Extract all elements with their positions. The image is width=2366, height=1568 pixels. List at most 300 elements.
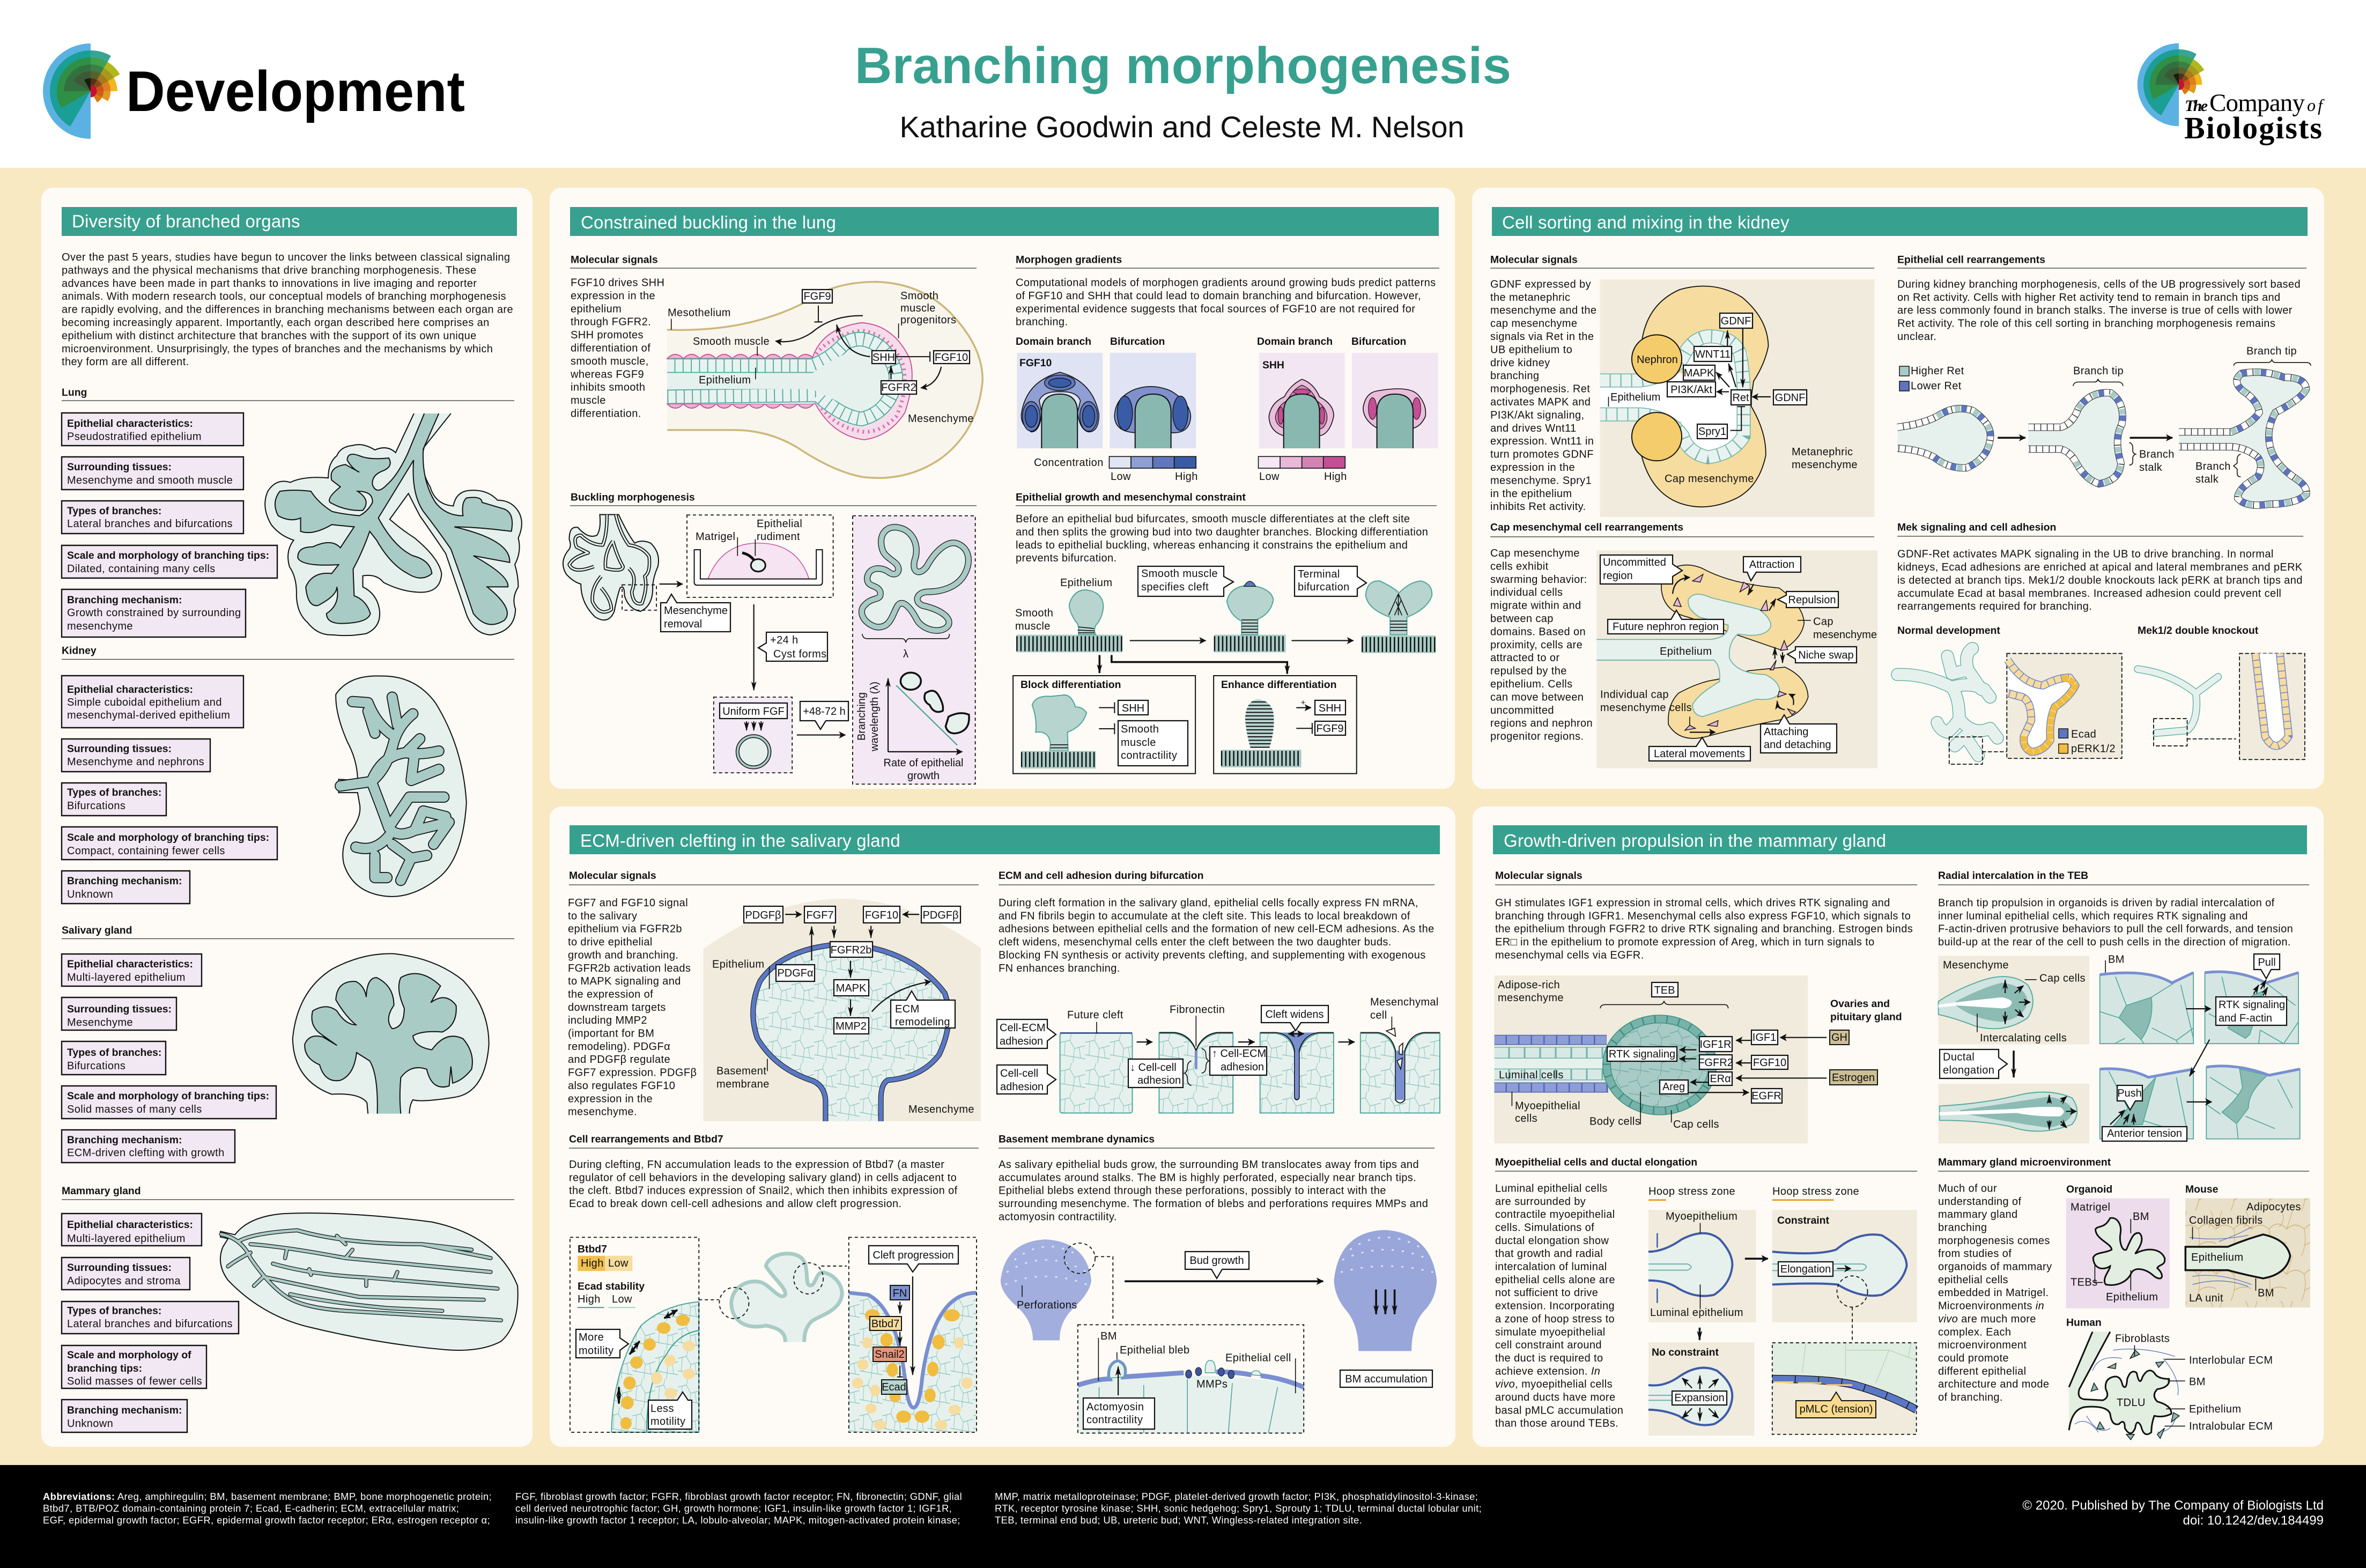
callout: less motility: Less xyxy=(650,1403,674,1415)
box: expansion: Expansion xyxy=(1674,1392,1725,1404)
text: myoepithelial cells: basal pMLC accumulation xyxy=(1495,1404,1623,1416)
diagram: Btbd7 and cleft progression: Low xyxy=(608,1258,629,1269)
text: salivary molecular signals: FGFR2b activation leads xyxy=(568,963,691,974)
abbreviations column 2: insulin-like growth factor 1 receptor; LA, lobulo-alveolar; MAPK, mitogen-activated protein kinase; xyxy=(515,1514,960,1526)
chart: morphogen concentration maps: Low xyxy=(1259,471,1280,483)
diagram: cap mesenchyme rearrangements xyxy=(1596,551,1877,768)
diagram: microenvironments: Human xyxy=(2066,1317,2102,1329)
diagram: lung bud signals: Mesenchyme xyxy=(908,413,974,425)
callout: attaching and detaching: Attaching xyxy=(1764,726,1808,738)
box: FN: FN xyxy=(893,1288,907,1299)
text: mammary microenvironment: from studies of xyxy=(1938,1248,2012,1260)
subsection heading: Cell rearrangements: Cell rearrangements and Btbd7 xyxy=(569,1134,723,1145)
section: Kidney: Kidney xyxy=(62,645,97,656)
text: myoepithelial cells: contractile myoepithelial xyxy=(1495,1209,1615,1221)
text: Mek signaling: is detected at branch tips. Mek1/2 double knockouts lack pERK at branch tips and xyxy=(1897,574,2303,586)
signal boxes: ERα xyxy=(1710,1073,1731,1085)
callout: ductal elongation xyxy=(1940,1049,2007,1078)
diagram: microenvironments: TDLU xyxy=(2117,1397,2146,1409)
abbreviations column 1: EGF, epidermal growth factor; EGFR, epidermal growth factor receptor; ERα, estrogen receptor α; xyxy=(43,1514,490,1526)
diagram: buckling morphogenesis: λ xyxy=(903,648,908,660)
box: smooth muscle contractility: Smooth xyxy=(1121,723,1159,735)
text: basement membrane: surrounding mesenchyme. The formation of blebs and perforations requires MMPs and xyxy=(999,1198,1428,1210)
diagram: cell sorting stages: stalk xyxy=(2139,462,2163,474)
callout: more motility: motility xyxy=(579,1345,613,1357)
salivary characteristics boxes: Branching mechanism: xyxy=(67,1134,182,1146)
callout: future nephron region: Future nephron region xyxy=(1613,621,1719,633)
text: salivary molecular signals: mesenchyme. xyxy=(568,1106,637,1118)
chart: morphogen concentration maps: Domain branch xyxy=(1257,336,1333,347)
signal boxes: FGFR2 xyxy=(1698,1057,1733,1069)
text: ECM and cell adhesion: During cleft formation in the salivary gland, epithelial cells focally express FN mRNA, xyxy=(999,897,1418,909)
callout: pMLC tension: pMLC (tension) xyxy=(1800,1403,1873,1415)
label: Nephron: Nephron xyxy=(1637,354,1678,366)
text: cell rearrangements: Ecad to break down cell-cell adhesions and allow cleft progression. xyxy=(569,1198,901,1210)
abbreviations column 3: TEB, terminal end bud; UB, ureteric bud; WNT, Wingless-related integration site. xyxy=(995,1514,1362,1526)
box: SHH inhibited: SHH xyxy=(1122,702,1144,714)
text: mammary microenvironment: architecture and mode xyxy=(1938,1379,2049,1391)
text: Mek signaling: GDNF-Ret activates MAPK signaling in the UB to drive branching. In normal xyxy=(1897,549,2274,560)
mammary characteristics boxes: Epithelial characteristics: xyxy=(67,1219,193,1231)
text: morphogen gradients: of FGF10 and SHH that could lead to domain branching and bifurcation. However, xyxy=(1016,290,1421,302)
text: salivary molecular signals: including MMP2 xyxy=(568,1015,647,1026)
chart: morphogen concentration maps: Bifurcation xyxy=(1110,336,1165,347)
box: SHH enhanced: SHH xyxy=(1319,702,1341,714)
diagram: cell sorting stages: Branch tip xyxy=(2246,345,2297,357)
box: increased cell-ECM adhesion: adhesion xyxy=(1221,1061,1264,1073)
box: Snail2: Snail2 xyxy=(875,1349,905,1360)
callout: uncommitted region xyxy=(1600,555,1682,584)
box: FGF9 inhibited: FGF9 xyxy=(1316,723,1344,735)
callout: cleft widens xyxy=(1261,1005,1328,1031)
heading bar xyxy=(1493,825,2307,854)
text: epithelial cell rearrangements: are less commonly found in branch stalks. The inverse is true of cells with lower xyxy=(1897,305,2293,316)
text: basement membrane: As salivary epithelial buds grow, the surrounding BM translocates away from tips and xyxy=(999,1159,1419,1171)
callout: +48-72 h: +48-72 h xyxy=(803,706,846,718)
text: salivary molecular signals: growth and branching. xyxy=(568,949,678,961)
callout: repulsion xyxy=(1778,591,1838,608)
diagram: smooth muscle and bifurcation: Smooth xyxy=(1015,607,1053,619)
diagram: cell sorting stages: stalk xyxy=(2195,474,2219,485)
text: salivary molecular signals: downstream targets xyxy=(568,1002,666,1014)
text: salivary molecular signals: FGF7 and FGF10 signal xyxy=(568,897,688,909)
mammary characteristics boxes: Adipocytes and stroma xyxy=(67,1275,181,1287)
text: cell rearrangements: the cleft. Btbd7 induces expression of Snail2, which then inhibits expression of xyxy=(569,1185,958,1197)
diagram: lung bud signals: muscle xyxy=(900,302,936,314)
mammary characteristics boxes: Unknown xyxy=(67,1418,113,1430)
label: Enhance differentiation: Enhance differentiation xyxy=(1221,679,1336,691)
text: mammary molecular signals: GH stimulates IGF1 expression in stromal cells, which drives RTK signaling and xyxy=(1495,897,1890,909)
callout: repulsion: Repulsion xyxy=(1788,594,1836,606)
text: myoepithelial cells: are surrounded by xyxy=(1495,1196,1586,1208)
text: cap mesenchymal: uncommitted xyxy=(1490,705,1554,716)
diagram: Btbd7 and cleft progression: High xyxy=(581,1258,604,1269)
kidney organ illustration xyxy=(336,676,467,897)
text: epithelial growth: Before an epithelial bud bifurcates, smooth muscle differentiates at the cleft site xyxy=(1016,513,1410,525)
lung characteristics boxes: Surrounding tissues: xyxy=(67,461,172,473)
callout: less motility: motility xyxy=(650,1416,685,1428)
legend: Ret activity: Higher Ret xyxy=(1911,365,1964,377)
callout: cell-ECM adhesion xyxy=(997,1019,1056,1048)
diagram: microenvironments xyxy=(2066,1184,2310,1440)
heading bar: Growth-driven propulsion in the mammary gland xyxy=(1504,831,1886,850)
diagram: TEB signals: Luminal cells xyxy=(1499,1069,1564,1081)
callout: uncommitted region: Uncommitted xyxy=(1603,557,1666,568)
text: ECM and cell adhesion: and FN fibrils begin to accumulate at the cleft site. This leads to local breakdown of xyxy=(999,910,1410,922)
signal boxes: IGF1 xyxy=(1753,1032,1776,1044)
text: mammary microenvironment: could promote xyxy=(1938,1352,2009,1364)
diagram: TEB signals: Body cells xyxy=(1589,1116,1640,1128)
callout: bud growth: Bud growth xyxy=(1189,1255,1244,1267)
section: Mammary gland: Mammary gland xyxy=(62,1185,141,1197)
text: mammary microenvironment: understanding of xyxy=(1938,1196,2021,1208)
diagram: bud growth and BM xyxy=(1001,1230,1437,1433)
callout: +24 h xyxy=(758,632,827,661)
signal boxes: PDGFβ xyxy=(922,909,959,921)
label: Mesothelium: Mesothelium xyxy=(668,307,731,319)
kidney characteristics boxes: Branching mechanism: xyxy=(67,875,182,887)
diagram: salivary bud signals: Basement xyxy=(716,1066,766,1077)
diagram: microenvironments: BM xyxy=(2258,1288,2274,1299)
diagram: kidney signals: Metanephric xyxy=(1792,446,1853,458)
diagram: buckling morphogenesis xyxy=(563,515,975,784)
text: kidney molecular signals: turn promotes GDNF xyxy=(1490,449,1594,461)
logo: The Company of Biologists xyxy=(2138,43,2325,145)
lung characteristics boxes: Lateral branches and bifurcations xyxy=(67,518,233,530)
text: epithelial cell rearrangements: unclear. xyxy=(1897,331,1936,343)
diagram: radial intercalation: Mesenchyme xyxy=(1943,959,2009,971)
text: salivary molecular signals: to MAPK signaling and xyxy=(568,975,681,987)
chart: morphogen concentration maps: Bifurcation xyxy=(1351,336,1406,347)
text: kidney molecular signals: the metanephric xyxy=(1490,292,1570,304)
section: Salivary gland: Salivary gland xyxy=(62,924,132,936)
signal boxes: RTK signaling xyxy=(1609,1048,1675,1060)
diagram: TEB signals: cells xyxy=(1515,1113,1537,1125)
text: mammary microenvironment: epithelial cells xyxy=(1938,1274,2008,1286)
box: Ecad: Ecad xyxy=(882,1381,906,1393)
subsection heading: Epithelial growth: Epithelial growth and mesenchymal constraint xyxy=(1016,491,1246,503)
section: Lung xyxy=(62,387,522,637)
text: mammary microenvironment: branching xyxy=(1938,1222,1987,1233)
signal boxes: WNT11 xyxy=(1695,349,1731,360)
authors: Katharine Goodwin and Celeste M. Nelson xyxy=(900,110,1464,144)
text: cell rearrangements: regulator of cell behaviors in the developing salivary gland) in cells adjacent to xyxy=(569,1172,957,1184)
text: salivary molecular signals: and PDGFβ regulate xyxy=(568,1054,670,1066)
callout: terminal bifurcation: bifurcation xyxy=(1298,581,1350,593)
diagram: kidney signals: Cap mesenchyme xyxy=(1665,473,1754,485)
text: kidney molecular signals: expression in the xyxy=(1490,462,1575,474)
diagram: hoop stress: Myoepithelium xyxy=(1666,1211,1737,1223)
kidney characteristics boxes: Compact, containing fewer cells xyxy=(67,845,225,857)
logo: The Company of Biologists: of xyxy=(2307,95,2325,115)
chart: morphogen concentration maps: FGF10 xyxy=(1019,357,1052,369)
text: molecular signals: expression in the xyxy=(571,290,655,302)
callout: pull xyxy=(2254,954,2280,979)
text: kidney molecular signals: mesenchyme and the xyxy=(1490,305,1596,316)
text: epithelial growth: and then splits the growing bud into two daughter branches. Blocking differentiation xyxy=(1016,526,1428,538)
text: salivary molecular signals: the expression of xyxy=(568,988,653,1000)
text: kidney molecular signals: UB epithelium to xyxy=(1490,344,1572,356)
diagram: kidney signals: mesenchyme xyxy=(1792,459,1858,471)
text: radial intercalation: build-up at the rear of the cell to push cells in the direction of migration. xyxy=(1938,936,2291,948)
text: mammary molecular signals: ER□ in the epithelium to promote expression of Areg, which in turn signals to xyxy=(1495,936,1875,948)
diagram: TEB signals: pituitary gland xyxy=(1830,1011,1902,1023)
signal boxes: FGFR2b xyxy=(831,944,871,956)
text: myoepithelial cells: achieve extension. In xyxy=(1495,1365,1600,1377)
mammary characteristics boxes: Solid masses of fewer cells xyxy=(67,1375,202,1387)
intro text: they form are all different. xyxy=(62,356,189,368)
callout: lateral movements: Lateral movements xyxy=(1654,748,1745,760)
salivary characteristics boxes: Mesenchyme xyxy=(67,1017,133,1029)
intro text: becoming increasingly apparent. Importantly, each organ described here comprises an xyxy=(62,317,490,329)
text: kidney molecular signals: drive kidney xyxy=(1490,357,1550,369)
text: mammary microenvironment: vivo are much more xyxy=(1938,1313,2036,1325)
signal boxes: FGF10 xyxy=(1753,1057,1786,1069)
diagram: cap mesenchyme rearrangements: Cap xyxy=(1813,616,1833,627)
diagram: hoop stress: No constraint xyxy=(1652,1347,1719,1358)
diagram: salivary bud signals: membrane xyxy=(716,1078,770,1090)
diagram: microenvironments: BM xyxy=(2189,1376,2206,1388)
diagram: cleft formation stages: Mesenchymal xyxy=(1370,996,1439,1008)
salivary characteristics boxes: Multi-layered epithelium xyxy=(67,972,186,983)
mammary characteristics boxes: Multi-layered epithelium xyxy=(67,1233,186,1245)
text: mammary microenvironment: mammary gland xyxy=(1938,1209,2018,1221)
box: decreased cell-cell adhesion: adhesion xyxy=(1137,1075,1181,1086)
signal boxes: GDNF xyxy=(1775,392,1805,404)
text: cap mesenchymal: swarming behavior: xyxy=(1490,574,1587,586)
diagram: microenvironments: Fibroblasts xyxy=(2115,1333,2170,1345)
diagram: cleft formation stages: Future cleft xyxy=(1067,1009,1123,1021)
box: increased cell-ECM adhesion: ↑ Cell-ECM xyxy=(1212,1048,1266,1060)
diagram: kidney signals: Epithelium xyxy=(1610,391,1660,403)
box: smooth muscle contractility: contractility xyxy=(1121,750,1177,761)
callout: +24 h: +24 h xyxy=(770,634,798,646)
lung characteristics boxes: Types of branches: xyxy=(67,505,161,517)
heading bar xyxy=(1492,207,2308,236)
kidney characteristics boxes: mesenchymal-derived epithelium xyxy=(67,709,230,721)
text: cap mesenchymal: repulsed by the xyxy=(1490,665,1567,677)
text: kidney molecular signals: signals via Ret in the xyxy=(1490,331,1594,343)
subsection heading: Myoepithelial cells: Myoepithelial cells and ductal elongation xyxy=(1495,1156,1697,1168)
diagram: buckling morphogenesis: wavelength (λ) xyxy=(869,682,881,752)
abbreviations column 1: Btbd7, BTB/POZ domain-containing protein 7; Ecad, E-cadherin; ECM, extracellular matrix; xyxy=(43,1503,459,1514)
kidney characteristics boxes: Simple cuboidal epithelium and xyxy=(67,697,222,708)
copyright: © 2020. Published by The Company of Biologists Ltd xyxy=(2022,1498,2324,1513)
chart: morphogen concentration maps: Concentration xyxy=(1034,457,1104,469)
text: salivary molecular signals: expression in the xyxy=(568,1093,653,1105)
salivary characteristics boxes: Types of branches: xyxy=(67,1047,161,1059)
signal boxes xyxy=(1667,313,1807,439)
kidney characteristics boxes: Mesenchyme and nephrons xyxy=(67,756,204,768)
mammary characteristics boxes: Surrounding tissues: xyxy=(67,1262,172,1274)
diagram: cap mesenchyme rearrangements: mesenchyme cells xyxy=(1600,702,1692,714)
panel: ECM-driven clefting in the salivary gland xyxy=(550,807,1455,1447)
callout: pMLC tension xyxy=(1796,1392,1876,1418)
text: molecular signals: FGF10 drives SHH xyxy=(571,277,664,289)
diagram: normal development and knockout: Normal development xyxy=(1897,625,2000,637)
box: Uniform FGF: Uniform FGF xyxy=(722,706,785,718)
box: FGF9: FGF9 xyxy=(803,291,831,302)
diagram: Btbd7 and cleft progression: Ecad stability xyxy=(578,1281,645,1292)
heading bar xyxy=(570,207,1439,236)
signal boxes: MMP2 xyxy=(836,1020,867,1032)
kidney characteristics boxes: Epithelial characteristics: xyxy=(67,684,193,696)
diagram: hoop stress: Luminal epithelium xyxy=(1650,1307,1743,1319)
diagram: normal development and knockout: pERK1/2 xyxy=(2071,743,2116,755)
diagram: cell sorting stages: Branch xyxy=(2195,461,2231,472)
kidney characteristics boxes: Scale and morphology of branching tips: xyxy=(67,832,269,844)
salivary characteristics boxes: Epithelial characteristics: xyxy=(67,958,193,970)
box: actomyosin contractility: contractility xyxy=(1086,1414,1143,1426)
subsection heading: Molecular signals: Molecular signals xyxy=(1490,254,1578,266)
box: elongation: Elongation xyxy=(1780,1263,1831,1275)
diagram: lung bud signals xyxy=(667,282,982,478)
text: epithelial cell rearrangements: During kidney branching morphogenesis, cells of the UB progressively sort based xyxy=(1897,278,2301,290)
callout: uncommitted region: region xyxy=(1603,570,1633,582)
text: myoepithelial cells: cells. Simulations of xyxy=(1495,1222,1594,1233)
text: salivary molecular signals: to the salivary xyxy=(568,910,637,922)
subsection heading: ECM and cell adhesion: ECM and cell adhesion during bifurcation xyxy=(999,870,1203,882)
diagram: microenvironments: Collagen fibrils xyxy=(2189,1215,2263,1226)
text: Mek signaling: rearrangements required for branching. xyxy=(1897,601,2092,612)
box: actomyosin contractility: Actomyosin xyxy=(1086,1401,1144,1413)
text: cap mesenchymal: progenitor regions. xyxy=(1490,731,1584,743)
callout: +48-72 h xyxy=(800,701,848,729)
diagram: TEB signals xyxy=(1494,975,1902,1143)
diagram: buckling morphogenesis: Rate of epithelial xyxy=(884,757,963,769)
callout: cleft progression xyxy=(869,1246,958,1272)
section: Salivary gland xyxy=(62,924,514,1163)
signal boxes: FGF7 xyxy=(806,909,834,921)
diagram: microenvironments: Intralobular ECM xyxy=(2189,1421,2273,1432)
heading bar xyxy=(62,207,517,236)
diagram: microenvironments: BM xyxy=(2133,1211,2149,1223)
text: ECM and cell adhesion: adhesions between epithelial cells and the formation of new cell-ECM adhesions. As the xyxy=(999,923,1435,935)
diagram: smooth muscle and bifurcation: muscle xyxy=(1015,620,1051,632)
text: kidney molecular signals: and drives Wnt11 xyxy=(1490,423,1577,434)
text: molecular signals: epithelium xyxy=(571,303,622,315)
box: decreased cell-cell adhesion xyxy=(1128,1059,1183,1088)
chart: morphogen concentration maps: High xyxy=(1324,471,1347,483)
kidney characteristics boxes: Bifurcations xyxy=(67,800,125,812)
callout: cell-ECM adhesion: Cell-ECM xyxy=(1000,1022,1046,1034)
salivary characteristics boxes: ECM-driven clefting with growth xyxy=(67,1147,225,1159)
text: myoepithelial cells: a zone of hoop stress to xyxy=(1495,1313,1615,1325)
callout: terminal bifurcation: Terminal xyxy=(1298,568,1340,580)
heading bar: Cell sorting and mixing in the kidney xyxy=(1502,212,1790,232)
text: molecular signals: SHH promotes xyxy=(571,329,644,341)
chart: morphogen concentration maps xyxy=(1016,336,1438,483)
callout: ductal elongation: elongation xyxy=(1943,1064,1994,1076)
box: anterior tension: Anterior tension xyxy=(2107,1128,2182,1140)
callout: cell-cell adhesion: adhesion xyxy=(1000,1081,1044,1093)
text: salivary molecular signals: (important for BM xyxy=(568,1027,654,1039)
salivary characteristics boxes: Bifurcations xyxy=(67,1060,125,1072)
text: molecular signals: muscle xyxy=(571,395,606,406)
diagram: radial intercalation: BM xyxy=(2108,953,2125,965)
diagram: hoop stress xyxy=(1648,1186,1917,1436)
text: mammary microenvironment: different epithelial xyxy=(1938,1365,2026,1377)
text: radial intercalation: Branch tip propulsion in organoids is driven by radial intercalation of xyxy=(1938,897,2275,909)
diagram: lung bud signals: Smooth muscle xyxy=(693,336,770,347)
callout: cell-cell adhesion: Cell-cell xyxy=(1000,1068,1038,1079)
salivary characteristics boxes: Solid masses of many cells xyxy=(67,1104,202,1115)
diagram: TEB signals: Cap cells xyxy=(1673,1119,1719,1130)
salivary characteristics boxes: Scale and morphology of branching tips: xyxy=(67,1090,269,1102)
text: morphogen gradients: branching. xyxy=(1016,316,1068,328)
text: basement membrane: Epithelial blebs extend through these perforations, possibly to interact with the xyxy=(999,1185,1386,1197)
text: mammary microenvironment: of branching. xyxy=(1938,1392,2003,1403)
text: cap mesenchymal: domains. Based on xyxy=(1490,626,1586,638)
abbreviations column 1: Areg, amphiregulin; BM, basement membrane; BMP, bone morphogenetic protein; xyxy=(117,1491,492,1502)
text: kidney molecular signals: mesenchyme. Spry1 xyxy=(1490,475,1592,486)
intro text: animals. With modern research tools, our conceptual models of branching morphogenesis xyxy=(62,291,506,302)
text: mammary molecular signals: branching through IGFR1. Mesenchymal cells also express FGF10, which signals to xyxy=(1495,910,1911,922)
callout: attraction xyxy=(1743,557,1801,581)
box: BM accumulation xyxy=(1340,1370,1432,1387)
signal boxes: PDGFβ xyxy=(745,909,781,921)
salivary characteristics boxes xyxy=(62,954,276,1163)
text: cap mesenchymal: regions and nephron xyxy=(1490,718,1593,729)
copyright: doi: 10.1242/dev.184499 xyxy=(2183,1513,2324,1528)
kidney characteristics boxes: Surrounding tissues: xyxy=(67,743,172,755)
box: RTK signaling and F-actin: and F-actin xyxy=(2219,1012,2272,1024)
callout: push xyxy=(2117,1085,2142,1110)
subsection heading: Buckling morphogenesis: Buckling morphogenesis xyxy=(571,491,695,503)
subsection heading: Molecular signals: Molecular signals xyxy=(1495,870,1583,882)
diagram: buckling morphogenesis: Epithelial xyxy=(757,518,802,530)
signal boxes: EGFR xyxy=(1751,1090,1781,1102)
callout: mesenchyme removal xyxy=(661,594,730,632)
diagram: buckling morphogenesis: Matrigel xyxy=(696,531,735,543)
diagram: microenvironments: Organoid xyxy=(2066,1184,2112,1195)
text: myoepithelial cells: Luminal epithelial cells xyxy=(1495,1182,1608,1194)
callout: ECM remodeling: remodeling xyxy=(895,1016,950,1028)
text: mammary microenvironment: embedded in Matrigel. xyxy=(1938,1287,2049,1299)
text: cap mesenchymal: between cap xyxy=(1490,613,1554,625)
text: mammary molecular signals: mesenchymal cells via EGFR. xyxy=(1495,949,1644,961)
box: Uniform FGF xyxy=(720,703,787,719)
signal boxes xyxy=(1607,982,1877,1103)
section: Mammary gland xyxy=(62,1185,518,1432)
callout: cell-cell adhesion xyxy=(997,1065,1056,1094)
diagram: bud growth and BM: Perforations xyxy=(1017,1299,1077,1311)
callout: terminal bifurcation xyxy=(1295,566,1366,596)
box: Btbd7: Btbd7 xyxy=(871,1318,899,1330)
text: cap mesenchymal: proximity, cells are xyxy=(1490,639,1583,651)
lung characteristics boxes xyxy=(62,413,277,637)
kidney characteristics boxes xyxy=(62,676,277,904)
diagram: TEB signals: mesenchyme xyxy=(1498,992,1564,1004)
callout: ductal elongation: Ductal xyxy=(1943,1051,1975,1063)
text: myoepithelial cells: that growth and radial xyxy=(1495,1248,1603,1260)
callout: ECM remodeling xyxy=(891,991,955,1028)
text: salivary molecular signals: epithelium via FGFR2b xyxy=(568,923,682,935)
box: SHH inhibited xyxy=(1118,700,1148,715)
diagram: Btbd7 and cleft progression xyxy=(570,1237,977,1432)
callout: lateral movements xyxy=(1649,737,1750,761)
diagram: cleft formation stages xyxy=(997,996,1440,1113)
text: epithelial cell rearrangements: on Ret activity. Cells with higher Ret activity tend to remain in branch tips and xyxy=(1897,292,2281,304)
text: Mek signaling: kidneys, Ecad adhesions are enriched at apical and lateral membranes and pERK xyxy=(1897,561,2303,573)
text: radial intercalation: inner luminal epithelial cells, which requires RTK signaling and xyxy=(1938,910,2248,922)
subsection heading: Mammary gland microenvironment: Mammary gland microenvironment xyxy=(1938,1156,2111,1168)
text: molecular signals: through FGFR2. xyxy=(571,316,651,328)
mammary characteristics boxes: Scale and morphology of xyxy=(67,1349,191,1361)
diagram: cap mesenchyme rearrangements: Epithelium xyxy=(1660,646,1712,657)
callout: push: Push xyxy=(2117,1088,2142,1099)
subsection heading: Cap mesenchymal: Cap mesenchymal cell rearrangements xyxy=(1490,521,1683,533)
